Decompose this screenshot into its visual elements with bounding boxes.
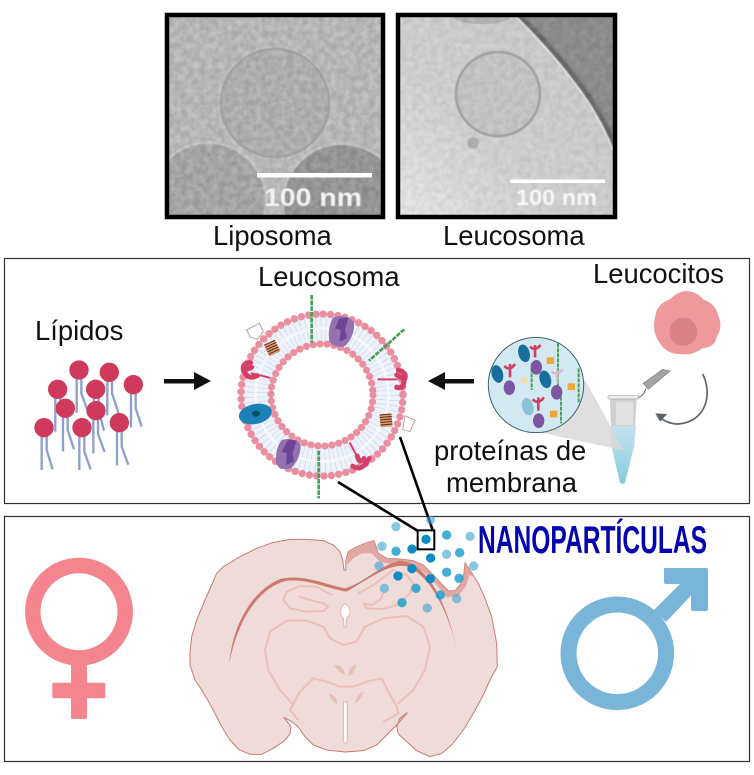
micrograph: leucosoma	[400, 10, 616, 215]
magnified protein circle	[488, 337, 584, 433]
scale bar: 100 nm	[510, 180, 605, 206]
cortical damage highlight	[347, 541, 475, 597]
scale bar: 100 nm	[257, 173, 372, 206]
nanoparticles	[374, 516, 478, 613]
icon: lipid molecules	[34, 360, 143, 470]
icon: male symbol	[568, 568, 708, 702]
label: proteínas de membrana: membrana	[446, 467, 578, 498]
label: Lípidos: Lípidos	[35, 315, 123, 346]
arrow: lipids to leucosome	[164, 372, 211, 390]
corpus callosum band	[229, 561, 458, 663]
arrow: proteins to leucosome	[428, 372, 474, 390]
micrograph: liposoma	[169, 17, 381, 215]
scale bar: 100 nm: 100 nm	[264, 184, 362, 212]
label: proteínas de membrana	[434, 435, 586, 498]
frame: liposoma	[167, 15, 383, 217]
panel: brain delivery	[4, 516, 750, 762]
icon: leukocyte cell	[654, 291, 720, 354]
leucosome vesicle	[237, 295, 415, 498]
label: Leucosoma: Leucosoma	[258, 261, 400, 292]
label: proteínas de membrana: proteínas de	[434, 435, 586, 466]
zoom box	[418, 530, 434, 549]
leukocyte and tube group	[488, 291, 720, 484]
caption: Liposoma: Liposoma	[213, 220, 333, 251]
connector lines	[338, 437, 433, 531]
scale bar: 100 nm: 100 nm	[516, 185, 597, 210]
label: Leucocitos: Leucocitos	[593, 258, 724, 289]
inner brain structures	[265, 570, 430, 722]
caption: Leucosoma: Leucosoma	[443, 220, 585, 251]
icon: female symbol	[33, 566, 125, 719]
frame: leucosoma	[398, 15, 615, 217]
membrane proteins	[237, 295, 415, 498]
panel: leucosome preparation	[4, 258, 750, 504]
magnifier cone	[542, 380, 624, 451]
icon: microcentrifuge tube	[608, 369, 670, 484]
arrow: cell lysis	[655, 374, 707, 424]
brain section	[190, 516, 497, 757]
